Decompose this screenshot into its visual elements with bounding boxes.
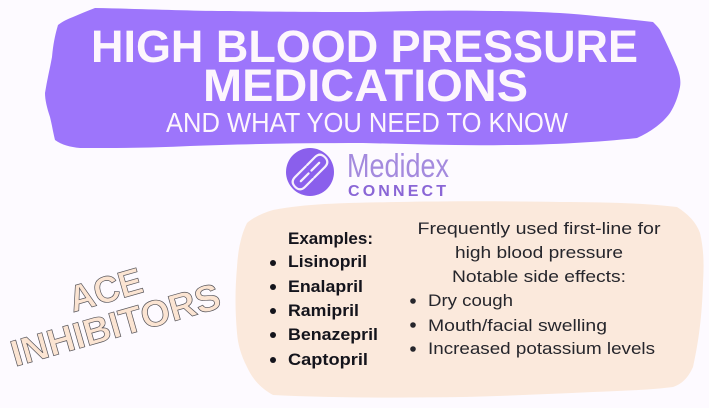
examples list: Captopril [288,351,368,369]
logo: Medidex Connect [286,147,449,200]
examples list [270,230,378,369]
examples list: Benazepril [288,326,378,344]
side effects list [410,291,655,358]
description text: high blood pressure [455,243,623,262]
side effects list: Mouth/facial swelling [428,316,607,335]
panel: purple title banner [45,8,680,148]
heading: ACE inhibitors rotated outline: ACE [64,260,147,320]
title: HIGH BLOOD PRESSURE [91,21,638,72]
examples list: Ramipril [288,302,359,320]
panel: ACE inhibitors details [236,201,704,398]
description text: Notable side effects: [452,267,626,286]
logo wordmark: Medidex [347,147,449,184]
icon: chain link circle [286,148,334,196]
examples list: Enalapril [288,278,363,296]
subtitle: AND WHAT YOU NEED TO KNOW [166,107,569,138]
side effects list: Dry cough [428,291,513,310]
examples heading: Examples: [288,230,373,248]
heading: ACE inhibitors rotated outline: INHIBITORS [6,276,225,374]
description text [418,219,661,286]
title [91,21,638,138]
title: MEDICATIONS [203,60,528,111]
description text: Frequently used first-line for [418,219,661,238]
side effects list: Increased potassium levels [428,339,655,358]
logo subword: CONNECT [348,183,446,200]
examples list: Lisinopril [288,253,367,271]
